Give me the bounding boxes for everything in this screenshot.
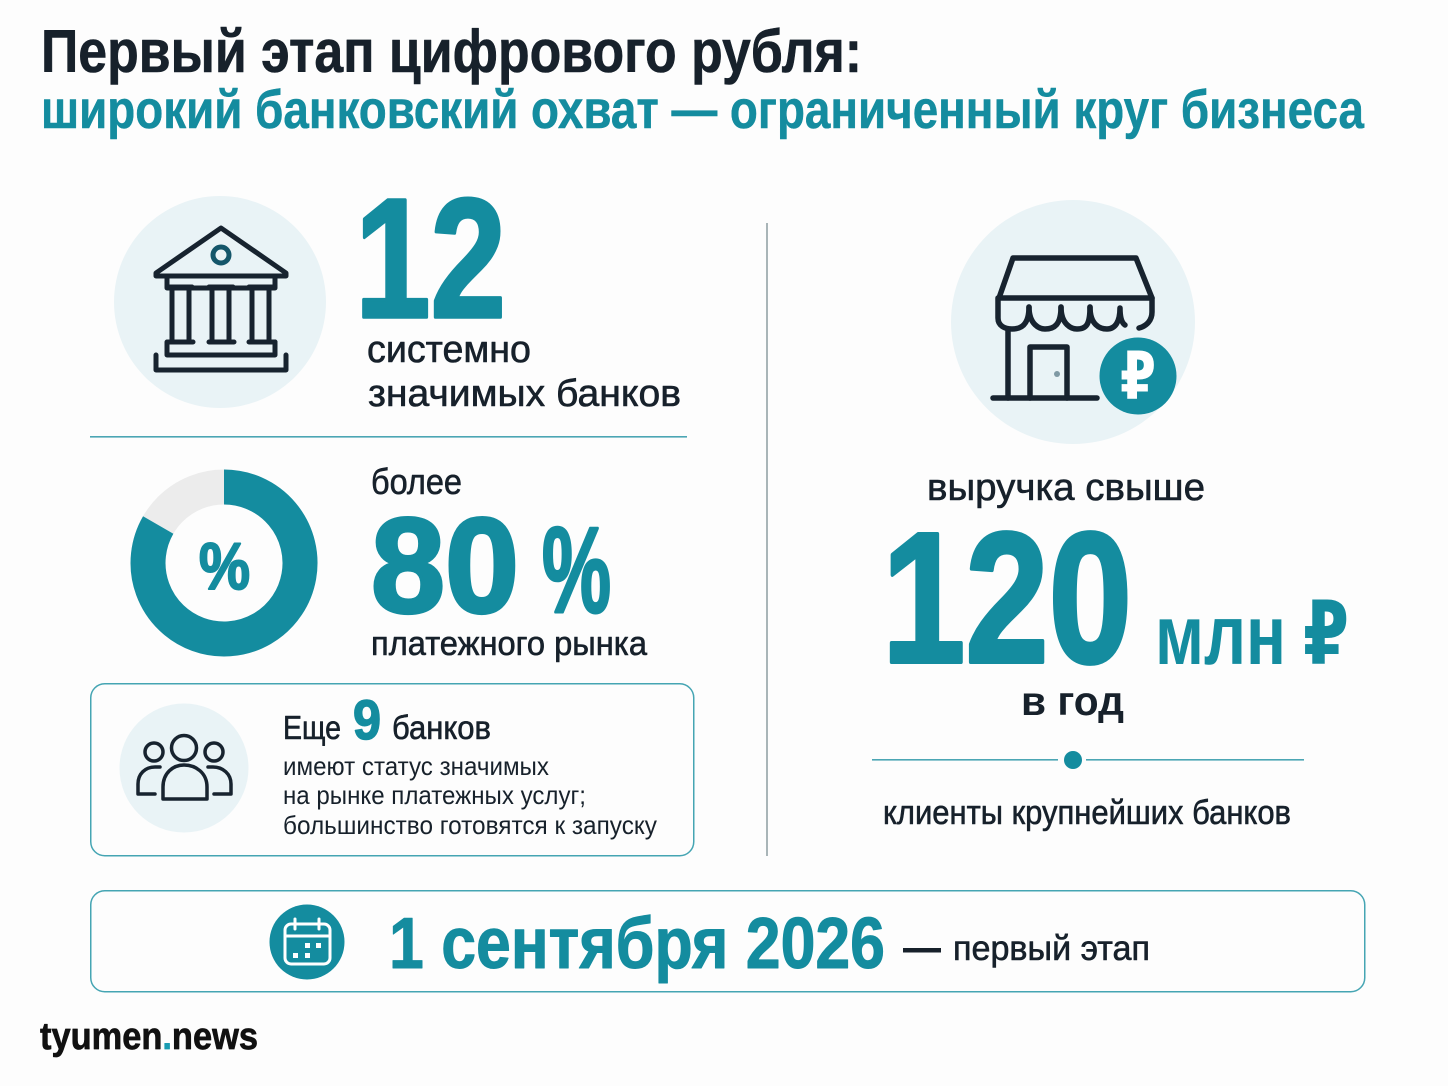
panel: payment market share (148, 461, 647, 663)
icon: store with ruble (951, 200, 1195, 444)
panel: business revenue (872, 200, 1349, 832)
number 120 million rubles: млн (1155, 588, 1286, 682)
text: 9 more banks (283, 688, 657, 840)
number 120 million rubles: 120 (882, 495, 1132, 702)
icon: calendar (270, 904, 344, 980)
label: systemically important banks (367, 329, 681, 415)
label: revenue over: выручка свыше (927, 467, 1205, 509)
label: clients of largest banks: клиенты крупнейших банков (883, 794, 1291, 832)
text: 9 more banks: большинство готовятся к запуску (283, 810, 657, 840)
title: Первый этап цифрового рубля: (41, 18, 862, 85)
icon: bank (114, 196, 326, 408)
text: 9 more banks: на рынке платежных услуг; (283, 780, 586, 810)
label: systemically important banks: системно (367, 329, 531, 371)
label: first stage: первый этап (953, 929, 1150, 968)
title (41, 18, 1365, 140)
panel: date banner (91, 891, 1365, 992)
label: systemically important banks: значимых банков (368, 373, 681, 415)
number 80 percent: % (542, 502, 611, 638)
text: 9 more banks: банков (392, 709, 491, 746)
dot divider (1064, 751, 1082, 769)
panel: 9 more banks (91, 684, 694, 856)
donut chart: % (199, 529, 250, 603)
donut chart (148, 487, 300, 639)
text: 9 more banks: 9 (353, 688, 381, 751)
number 12: 12 (355, 164, 506, 354)
number 120 million rubles (882, 495, 1349, 702)
logo: tyumen.news (40, 1016, 258, 1058)
label: per year: в год (1021, 678, 1124, 724)
date: 1 сентября 2026 (389, 904, 885, 984)
icon: people (120, 704, 248, 832)
number 80 percent (371, 490, 611, 641)
number 120 million rubles: ₽ (1303, 584, 1349, 683)
number 80 percent: 80 (371, 490, 519, 641)
text: 9 more banks: Еще (283, 709, 341, 746)
text: 9 more banks: имеют статус значимых (283, 751, 549, 781)
panel: banks stat (114, 164, 681, 415)
label: payment market: платежного рынка (371, 625, 647, 663)
label: more than: более (371, 461, 462, 502)
icon: store with ruble: ₽ (1120, 339, 1156, 413)
